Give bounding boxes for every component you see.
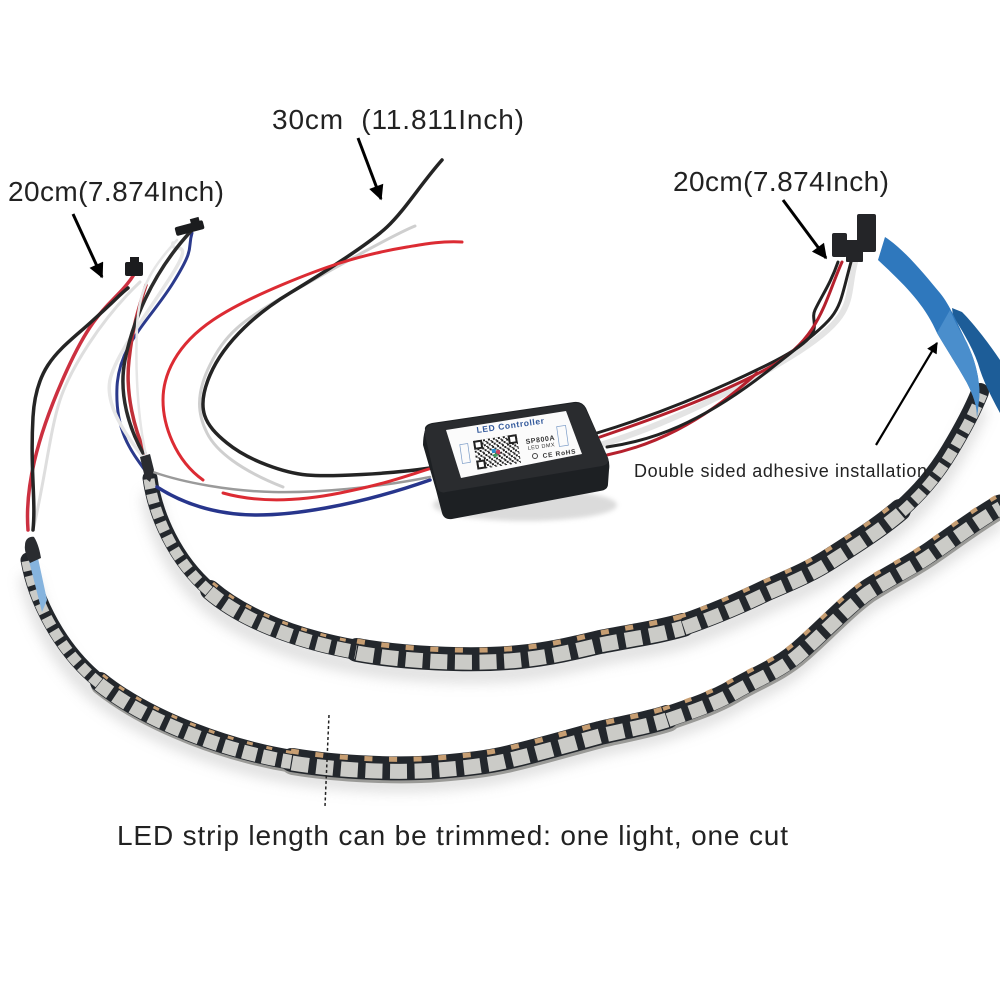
wires: left controller bundle	[153, 160, 462, 515]
LED strip: lower	[27, 497, 1000, 783]
label: adhesive note: Double sided adhesive installation	[634, 461, 927, 481]
controller label	[446, 411, 582, 478]
connector: left white plug	[125, 257, 143, 276]
controller label: SP800A	[525, 435, 555, 446]
LED strip: upper	[149, 392, 982, 674]
connector: upper plug	[173, 216, 205, 236]
wires: strip branch to left connector	[27, 273, 140, 530]
label: trimming note: LED strip length can be trimmed: one light, one cut	[117, 820, 788, 851]
label: 20cm left: 20cm(7.874Inch)	[8, 176, 224, 207]
wires: strip branch to upper-left connector	[109, 230, 192, 473]
connector: right plugs	[832, 214, 876, 262]
controller label: LED DMX	[527, 442, 555, 452]
label: 30cm: 30cm (11.811Inch)	[272, 104, 524, 135]
blue adhesive tape	[28, 237, 1000, 612]
label: 20cm right: 20cm(7.874Inch)	[673, 166, 889, 197]
sleeves: heat shrink	[25, 454, 154, 563]
arrow: 20cm left	[73, 214, 102, 277]
arrow: adhesive	[876, 343, 937, 445]
controller label: CE RoHS	[542, 448, 577, 460]
QR code	[473, 434, 521, 470]
wires: right controller bundle	[597, 262, 855, 455]
arrow: 20cm right	[783, 200, 826, 258]
controller label: LED Controller	[476, 416, 545, 435]
cut line	[325, 715, 329, 806]
arrow: 30cm	[358, 138, 381, 199]
controller box	[423, 402, 617, 521]
